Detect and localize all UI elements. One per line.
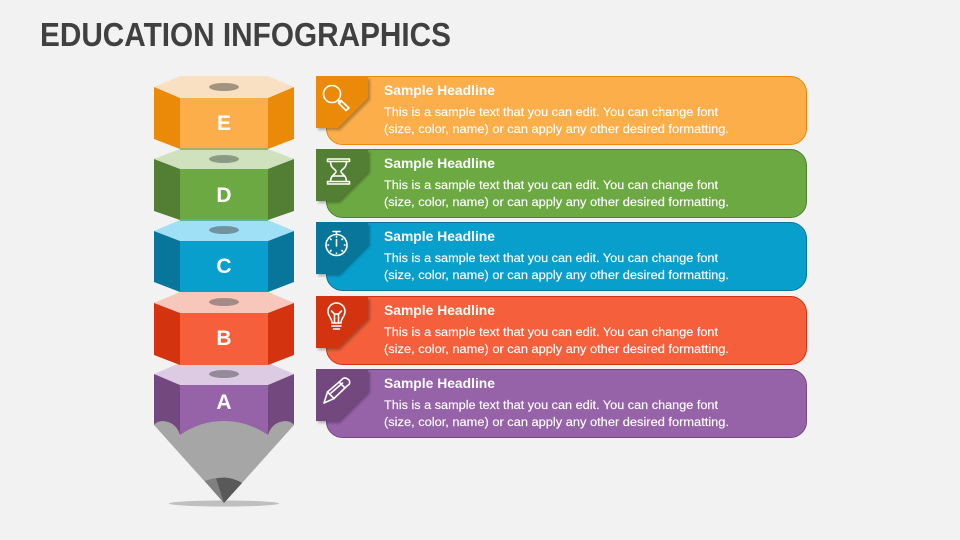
headline: Sample Headline [384, 82, 495, 98]
body text: (size, color, name) or can apply any other desired formatting. [384, 122, 729, 136]
panel: A [316, 369, 806, 438]
block B: B [216, 327, 232, 350]
body text: (size, color, name) or can apply any other desired formatting. [384, 268, 729, 282]
pencil lead cone [154, 420, 294, 503]
body text [384, 325, 729, 356]
icon: light bulb [328, 303, 345, 329]
panel: D [316, 149, 806, 218]
block E: E [217, 112, 231, 135]
headline: Sample Headline [384, 375, 495, 391]
headline: Sample Headline [384, 302, 495, 318]
block E [154, 76, 294, 150]
title: EDUCATION INFOGRAPHICS [40, 16, 451, 53]
body text [384, 398, 729, 429]
block A [154, 363, 294, 435]
body text: This is a sample text that you can edit. You can change font [384, 251, 719, 265]
block C: C [216, 255, 232, 278]
ground shadow [169, 500, 279, 506]
body text [384, 178, 729, 209]
body text: This is a sample text that you can edit. You can change font [384, 178, 719, 192]
body text: (size, color, name) or can apply any other desired formatting. [384, 195, 729, 209]
body text [384, 105, 729, 136]
icon: hourglass [328, 159, 350, 184]
body text: This is a sample text that you can edit. You can change font [384, 398, 719, 412]
body text: This is a sample text that you can edit. You can change font [384, 325, 719, 339]
body text [384, 251, 729, 282]
block A: A [216, 391, 232, 414]
headline: Sample Headline [384, 155, 495, 171]
icon: magnifier [324, 86, 349, 110]
icon: pencil [324, 378, 350, 403]
tag [316, 76, 368, 128]
panel: C [316, 222, 806, 290]
block B [154, 292, 294, 365]
block C [154, 220, 294, 292]
body text: This is a sample text that you can edit. You can change font [384, 105, 719, 119]
headline: Sample Headline [384, 228, 495, 244]
tag [316, 369, 368, 421]
pencil illustration [154, 76, 294, 506]
tag [316, 222, 368, 274]
tag [316, 296, 368, 348]
block D [154, 149, 294, 221]
body text: (size, color, name) or can apply any other desired formatting. [384, 342, 729, 356]
body text: (size, color, name) or can apply any other desired formatting. [384, 415, 729, 429]
icon: stopwatch [326, 232, 347, 256]
panel: E [316, 76, 806, 144]
tag [316, 149, 368, 201]
panel: B [316, 296, 806, 364]
block D: D [216, 184, 232, 207]
